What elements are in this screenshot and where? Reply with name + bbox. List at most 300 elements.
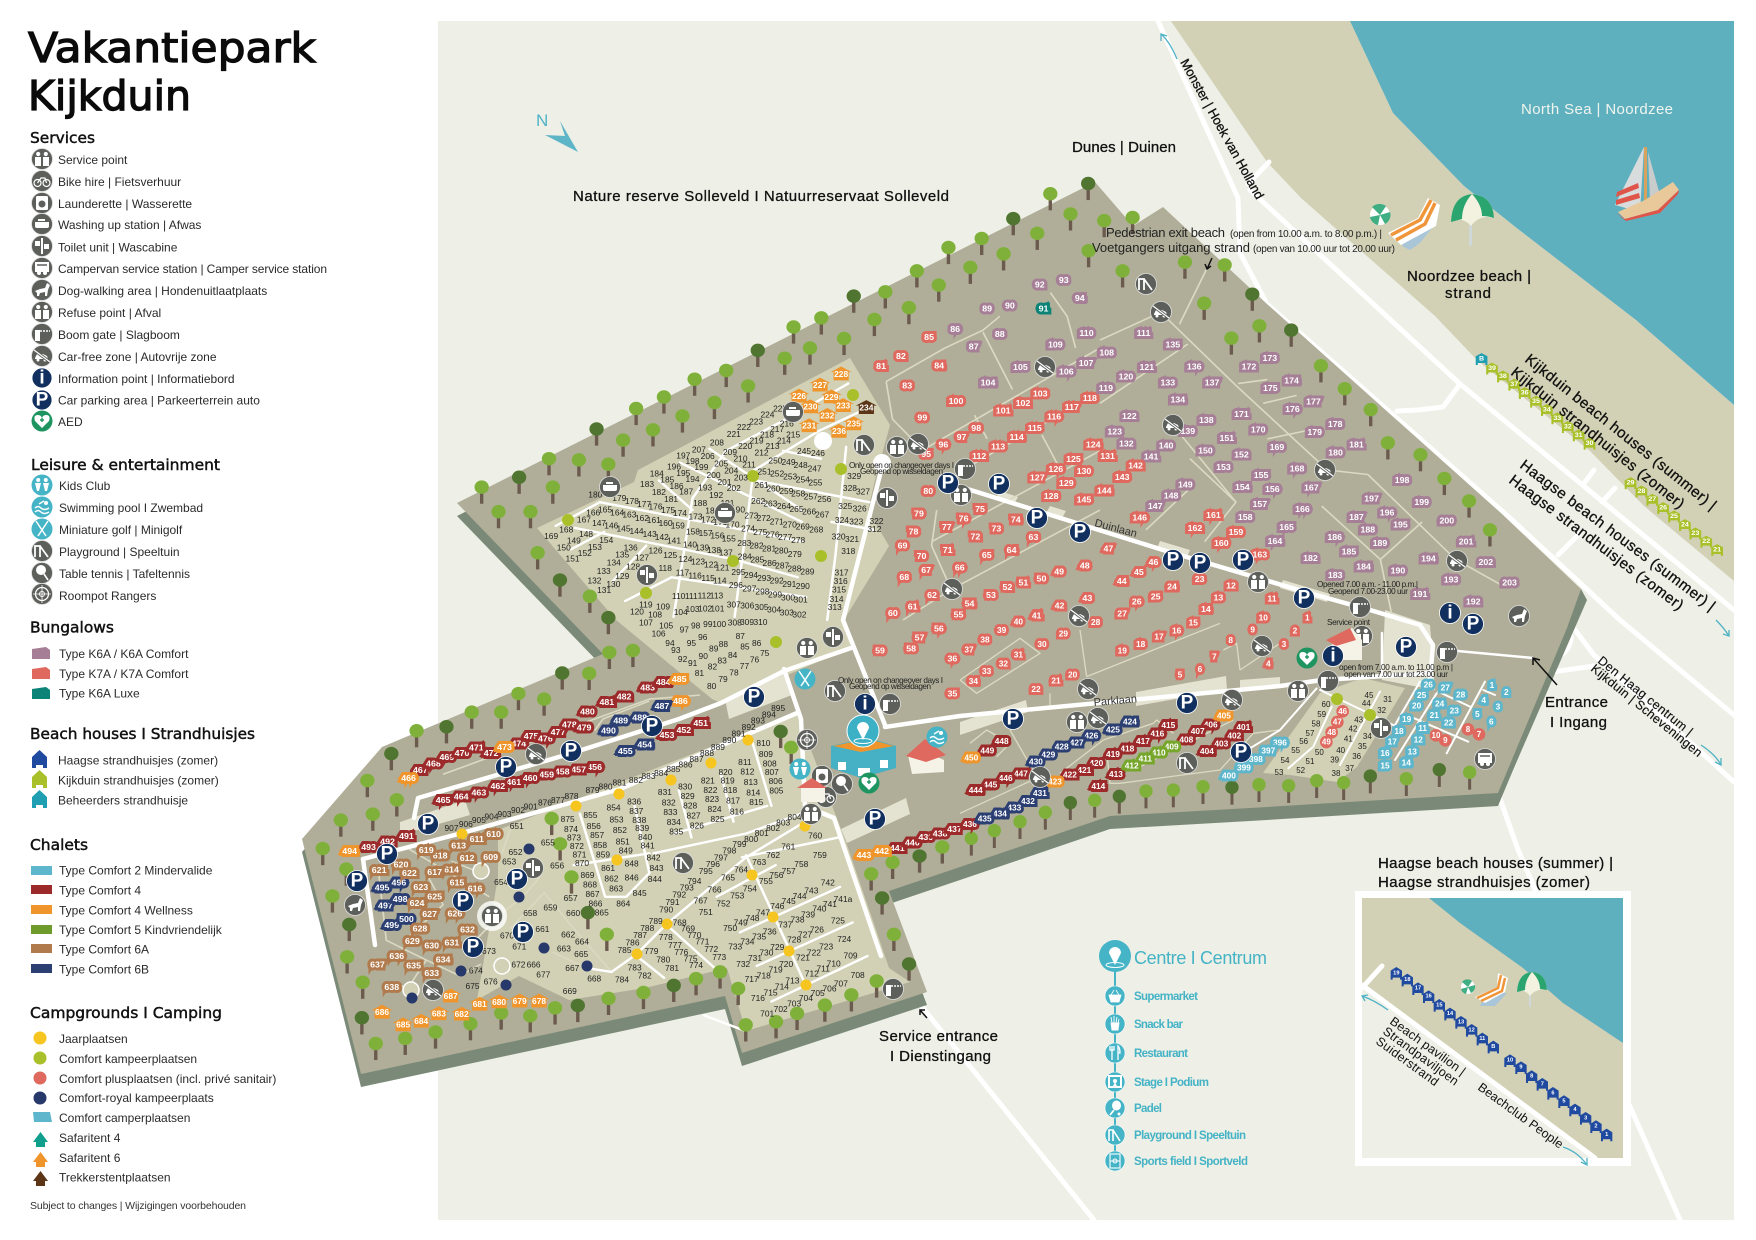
chalet labels (west): 441 (890, 843, 905, 853)
camping pitch numbers (north field): 134 (607, 559, 621, 567)
bungalow labels (north-east): 11 (1267, 594, 1277, 603)
camping pitch numbers (north field): 220 (738, 442, 753, 451)
centre facility names: Restaurant (1134, 1048, 1188, 1060)
bungalow labels: Type K7A: 96 (938, 440, 949, 450)
camping pitch numbers (east field): 41 (1344, 734, 1353, 743)
service labels: Dog-walking area | Hondenuitlaatplaats (58, 284, 267, 298)
chalet labels (south-centre): 19 (1118, 645, 1127, 655)
chalet labels (south-centre): 33 (982, 666, 992, 676)
bungalow labels: Type K7A: 118 (1083, 393, 1097, 403)
icon: centre pin (1099, 940, 1131, 972)
bungalow labels: Type K7A: 55 (954, 610, 964, 619)
chalet labels (west): 496 (392, 878, 407, 887)
chalet labels: Type Comfort 4 (59, 884, 141, 898)
parking signs (346, 472, 1484, 958)
camping pitch numbers (south field): 669 (563, 987, 577, 996)
inset: beach houses: B (1491, 1044, 1495, 1050)
parking signs: P (1235, 742, 1248, 762)
bungalow labels (north-east): 157 (1253, 499, 1267, 509)
chalet labels (south-centre): 9 (1250, 624, 1255, 634)
chalet labels (west): 56 (934, 624, 944, 634)
camping pitch numbers (south field): 98 (691, 622, 701, 630)
chalet labels (west): 629 (405, 936, 420, 946)
bungalow labels: Type K7A: 84 (934, 361, 944, 370)
camping pitch numbers (north field): 272 (757, 514, 771, 523)
camping pitch numbers (south field): 794 (687, 877, 702, 886)
camping pitch numbers (south field): 96 (698, 633, 708, 642)
centre facility names (1134, 991, 1248, 1168)
camping pitch numbers (south field): 858 (593, 841, 608, 850)
camping pitch numbers (south field): 665 (574, 950, 589, 959)
safari tents north: 230 (803, 403, 818, 412)
camping pitch numbers (south field): 760 (808, 832, 823, 841)
chalet labels (south-centre): 434 (993, 809, 1007, 819)
bungalow labels: Type K7A: 68 (899, 572, 909, 582)
camping pitch numbers (south field): 815 (749, 798, 764, 807)
chalet labels (south-centre): 21 (1051, 676, 1061, 686)
camping pitch numbers (south field): 732 (736, 960, 751, 969)
camping pitch numbers (south field): 892 (742, 723, 756, 732)
chalet labels (west): 630 (424, 941, 439, 951)
camping pitch numbers (south field): 746 (770, 902, 785, 911)
camping pitch numbers (north field): 187 (679, 488, 694, 497)
bungalow labels (north-east): 203 (1502, 578, 1517, 588)
camping pitch numbers (south field): 826 (690, 822, 704, 830)
inset: place labels: Strandpaviljoen (1380, 1024, 1461, 1088)
camping pitch numbers (south field): 797 (714, 854, 728, 862)
chalet labels (south-centre): 5 (1178, 670, 1183, 680)
parking signs: P (1181, 692, 1194, 714)
inset: place labels: Beach pavilion | (1387, 1014, 1468, 1078)
camping pitch numbers (north field): 125 (663, 551, 678, 560)
inset: beach houses: 19 (1393, 970, 1399, 976)
camping pitch numbers (south field): 94 (665, 639, 675, 648)
camper pitches and bungalows (east): 3 (1282, 639, 1287, 649)
camping pitch numbers (north field): 124 (678, 555, 693, 564)
info, parking signs: P (36, 390, 49, 410)
camping pitch numbers (south field): 853 (610, 816, 624, 824)
heading: Bungalows: Bungalows (30, 618, 114, 636)
camping pitch numbers (south field): 867 (586, 890, 600, 899)
bungalow labels (north-east): 198 (1395, 475, 1410, 485)
camping pitch numbers (north field): 140 (683, 541, 698, 550)
bungalow labels (north-east): 131 (1100, 451, 1115, 461)
camping pitch numbers (south field): 727 (798, 931, 813, 939)
camping pitch numbers (north field): 128 (626, 563, 641, 571)
camping pitch numbers (south field): 724 (837, 935, 852, 944)
bungalow labels: Type K7A: 116 (1047, 412, 1061, 422)
camping pitch numbers (north field): 261 (755, 481, 769, 490)
camping pitch numbers (south field): 787 (633, 931, 648, 940)
camping pitch numbers (north field): 278 (791, 536, 806, 545)
bungalow labels: Type K7A: 64 (1007, 545, 1017, 555)
small map notes: Geopend op wisseldagen (849, 682, 931, 691)
camping pitch numbers (north field): 133 (597, 567, 611, 576)
chalet labels (west): 452 (676, 725, 691, 735)
legend: Beach houses (30, 725, 255, 808)
camping pitch numbers (north field): 290 (796, 582, 810, 591)
camping pitch numbers (north field): 172 (701, 516, 716, 524)
camping pitch numbers (north field): 315 (832, 586, 847, 595)
AED icon (32, 410, 52, 432)
bungalow swatches (32, 647, 50, 699)
service labels: AED (58, 415, 83, 429)
camping pitch numbers (south field): 768 (673, 919, 687, 928)
bungalow labels: Type K6A (north-west): 105 (1013, 362, 1028, 372)
bungalow labels (north-east): 159 (1229, 527, 1244, 537)
camping pitch numbers (north field): 307 (727, 601, 741, 609)
AED icon at entrance (1296, 648, 1318, 668)
leisure icons (32, 474, 52, 604)
camping pitch numbers (north field): 164 (610, 508, 625, 517)
camping pitch numbers (north field): 280 (774, 547, 789, 556)
camper pitches and bungalows (east): 25 (1417, 690, 1427, 700)
camping pitch numbers (south field): 812 (740, 768, 755, 777)
chalet labels (south-centre): 405 (1217, 711, 1231, 721)
icon: restaurant (1105, 1043, 1125, 1063)
bungalow labels (north-east): 108 (1099, 348, 1114, 358)
chalet labels (west): 627 (422, 909, 437, 919)
camping pitch numbers (south field): 775 (684, 955, 698, 963)
camper pitches and bungalows (east): 3 (1496, 702, 1501, 712)
camping pitch numbers (north field): 170 (726, 521, 740, 529)
camping pitch numbers (south field): 870 (575, 859, 589, 868)
camping pitch numbers (east field): 32 (1377, 706, 1387, 715)
camping pitch numbers (south field): 757 (782, 867, 796, 876)
kids club icon (790, 758, 810, 780)
camping pitch numbers (east field): 42 (1349, 724, 1358, 733)
camping pitch numbers (south field): 807 (765, 768, 779, 777)
camping pitch numbers (north field): 147 (592, 519, 607, 528)
camping pitch numbers (north field): 276 (765, 531, 780, 539)
camping pitch numbers (east field): 56 (1299, 737, 1309, 746)
inset: beach houses: 15 (1436, 1002, 1442, 1008)
camping pitch numbers (north field): 254 (796, 476, 810, 484)
service labels: Refuse point | Afval (58, 306, 161, 320)
camping pitch numbers (south field): 721 (796, 954, 810, 962)
camping pitch numbers (south field): 75 (760, 649, 770, 658)
camping pitch numbers (south field): 834 (667, 818, 681, 827)
camping pitch numbers (south field): 889 (711, 743, 725, 752)
bungalow labels (north-east): 160 (1214, 538, 1229, 548)
camping pitch numbers (south field): 904 (484, 813, 499, 822)
bungalow labels: Type K7A: 79 (914, 509, 924, 518)
chalet labels (west): 465 (436, 795, 451, 805)
camper pitches and bungalows (east): 17 (1388, 736, 1397, 746)
camping pitch numbers (south field): 754 (743, 885, 757, 894)
camping pitch numbers (north field): 249 (781, 458, 796, 467)
inset: beach houses: 18 (1404, 977, 1410, 983)
camping pitch numbers (south field): 813 (744, 778, 758, 787)
camping pitch numbers (north field): 188 (693, 499, 708, 508)
camping pitch numbers (south field): 888 (700, 749, 715, 758)
camping pitch numbers (north field): 200 (707, 471, 721, 480)
camping pitch numbers (south field): 703 (787, 1000, 802, 1009)
chalet labels (west): 487 (655, 701, 670, 711)
inset: beach houses: 11 (1479, 1036, 1485, 1042)
camping pitch numbers (south field): 827 (687, 812, 701, 820)
bungalow labels: Type K6A (north-west): 91 (1039, 304, 1049, 313)
bungalow labels (north-east): 136 (1187, 362, 1202, 371)
icon: supermarket (1105, 986, 1125, 1006)
camping pitch numbers (south field): 842 (647, 854, 661, 862)
chalet labels (west): 458 (555, 767, 570, 777)
camping pitch numbers (south field): 796 (706, 860, 720, 869)
small map notes: open from 7.00 a.m. to 11.00 p.m | (1339, 663, 1453, 672)
bungalow labels: Type K7A: 65 (982, 550, 992, 560)
camping pitch numbers (south field): 883 (641, 772, 656, 781)
bungalow labels (north-east): 166 (1295, 504, 1310, 514)
small map notes: Only open on changeover days I (838, 676, 943, 685)
bungalow labels (north-east): 13 (1214, 593, 1224, 602)
bungalow labels: Type K7A: 128 (1044, 491, 1059, 501)
camping pitch numbers (north field): 174 (673, 509, 687, 518)
icon: deck chair (1388, 198, 1440, 250)
parking signs: P (351, 870, 364, 892)
beach house labels: Kijkduin strandhuisjes (zomer) (58, 774, 219, 788)
service labels (58, 153, 327, 429)
parking signs: P (869, 808, 882, 830)
bungalow labels (north-east): 189 (1373, 538, 1387, 548)
camping pitch numbers (north field): 135 (615, 551, 630, 559)
camping labels: Comfort camperplaatsen (59, 1111, 190, 1125)
chalet labels (south-centre): 420 (1089, 758, 1104, 768)
camping pitch numbers (north field): 152 (578, 549, 592, 558)
camping pitch numbers (north field): 262 (751, 497, 766, 506)
camping pitch numbers (north field): 186 (670, 482, 684, 491)
chalet labels (west): 626 (448, 909, 462, 918)
camping symbols (33, 1032, 52, 1186)
camping pitch numbers (north field): 253 (783, 472, 798, 481)
camper pitches and bungalows (east): 24 (1435, 698, 1445, 708)
service labels: Information point | Informatiebord (58, 372, 235, 386)
bungalow labels (north-east): 188 (1360, 525, 1375, 535)
camper pitches and bungalows (east): 23 (1450, 706, 1459, 716)
camping pitch numbers (north field): 184 (650, 470, 664, 478)
bungalow labels: Type K7A: 126 (1048, 464, 1063, 474)
small map notes (838, 461, 1453, 691)
camping pitch numbers (south field): 894 (762, 711, 776, 719)
chalet labels (west): 632 (460, 925, 475, 934)
chalet labels (west): 615 (450, 878, 465, 887)
camping pitch numbers (north field): 324 (835, 516, 849, 525)
camping pitch numbers (north field): 195 (676, 469, 691, 478)
parking signs: P (381, 844, 394, 864)
bungalow labels: Type K7A: 85 (924, 332, 934, 342)
camping pitch numbers (south field): 672 (511, 961, 526, 970)
camping pitch numbers (north field): 300 (781, 594, 796, 603)
camping pitch numbers (north field): 129 (615, 572, 630, 581)
map label: Den Haag: Kijkduin | Scheveningen (1588, 661, 1705, 760)
bungalow labels: Type K7A: 66 (955, 563, 965, 572)
camping pitch numbers (north field): 294 (744, 571, 759, 580)
camping labels: Safaritent 6 (59, 1151, 121, 1165)
camper pitches and bungalows (east): 16 (1380, 748, 1390, 758)
camping pitch numbers (south field): 780 (656, 956, 671, 964)
bungalow labels (north-east): 146 (1132, 513, 1147, 522)
camping pitch numbers (north field): 267 (815, 511, 830, 520)
chalet labels (west): 611 (470, 834, 484, 844)
inset: direction arrows (1362, 995, 1587, 1165)
bungalow labels: Type K7A / K7A Comfort (59, 667, 189, 681)
central buildings (790, 628, 1362, 802)
camping pitch numbers (north field): 312 (867, 525, 882, 534)
camping pitch numbers (north field): 180 (588, 491, 603, 499)
camping pitch numbers (south field): 854 (607, 804, 621, 813)
parking signs: P (748, 686, 761, 708)
chalet labels (west): 472 (484, 748, 499, 758)
bungalow labels: Type K6A (north-west) (876, 275, 1101, 620)
camping pitch numbers (south field): 107 (639, 619, 653, 628)
leisure labels: Table tennis | Tafeltennis (59, 567, 190, 581)
chalet labels: Type Comfort 2 Mindervalide (59, 864, 213, 878)
comfort plus pitches: 9 (1443, 736, 1448, 745)
camping pitch numbers (north field): 251 (758, 468, 772, 476)
camping pitch numbers (south field): 87 (736, 632, 745, 641)
camping pitch numbers (north field): 169 (544, 532, 559, 541)
camper pitches and bungalows (east): 14 (1402, 758, 1411, 768)
inset: beach houses: 12 (1469, 1027, 1475, 1033)
camping pitch numbers (north field): 326 (853, 505, 867, 513)
camping pitch numbers (south field): 811 (738, 758, 752, 767)
camping pitch numbers (south field): 779 (644, 947, 659, 956)
chalet labels (west): 621 (372, 865, 387, 875)
camping pitch numbers (east field): 43 (1354, 715, 1364, 724)
bungalow labels (north-east): 141 (1144, 452, 1159, 462)
chalet labels (west): 453 (660, 730, 675, 740)
inset: beach houses: 16 (1426, 994, 1432, 1000)
chalet labels (south-centre): 436 (963, 819, 977, 829)
camper pitches and bungalows (east): 2 (1504, 687, 1509, 697)
camping pitch numbers (north field): 296 (729, 581, 743, 590)
bungalow labels: Type K7A: 61 (908, 602, 918, 611)
north arrow: N (536, 111, 548, 130)
chalet labels (west): 443 (857, 850, 872, 860)
parking signs: i (1447, 602, 1453, 624)
trees (316, 177, 1497, 1060)
bungalow labels: Type K7A: 43 (1082, 593, 1092, 603)
camping pitch numbers (north field): 154 (599, 536, 614, 545)
safari tents north: 229 (824, 393, 839, 402)
camping pitch numbers (south field): 92 (678, 655, 688, 664)
parking signs: P (517, 922, 530, 942)
camping pitch numbers (south field): 709 (844, 952, 858, 960)
chalet labels (south-centre): 7 (1212, 652, 1217, 662)
Kijkduin beach houses: 24 (1681, 522, 1689, 528)
camper pitches and bungalows (east): 1 (1490, 680, 1495, 690)
chalet labels (south-centre) (963, 610, 1271, 829)
chalet labels (south-centre): 418 (1120, 743, 1135, 753)
camping pitch numbers (south field): 734 (740, 938, 755, 947)
chalet labels (west): 628 (413, 924, 428, 933)
camping pitch numbers (north field): 301 (794, 596, 808, 605)
camping pitch numbers (south field): 825 (711, 815, 725, 824)
camping pitch numbers (north field): 252 (770, 470, 785, 478)
chalet labels (south-centre): 446 (999, 773, 1013, 783)
camping pitch numbers (north field): 321 (845, 535, 860, 544)
comfort plus pitches: 47 (1333, 717, 1342, 726)
bungalow labels (north-east): 137 (1205, 378, 1220, 388)
safari tents south: 686 (375, 1008, 390, 1017)
safari tents south: 684 (414, 1017, 429, 1026)
camping pitch numbers (north field): 273 (744, 512, 759, 520)
centre legend (1099, 940, 1267, 1171)
camping pitch numbers (north field): 299 (768, 591, 783, 599)
camping pitch numbers (south field): 885 (666, 765, 681, 774)
bungalow labels (north-east): 111 (1137, 328, 1151, 338)
camper pitches and bungalows (east): 21 (1430, 710, 1439, 720)
camping pitch numbers (south field): 906 (459, 820, 473, 829)
chalet labels (west): 473 (497, 742, 512, 752)
camping pitch numbers (south field): 814 (746, 789, 761, 798)
camping pitch numbers (south field): 784 (615, 976, 629, 985)
safari tents north: 226 (792, 392, 807, 401)
chalet labels (west): 498 (393, 894, 408, 904)
chalet labels (west): 477 (551, 727, 566, 737)
camping pitch numbers (south field): 748 (745, 914, 760, 923)
camping pitch numbers (south field): 93 (671, 646, 681, 655)
camping pitch numbers (north field): 137 (719, 549, 733, 558)
camper pitches and bungalows (east): 27 (1441, 682, 1450, 692)
bungalow labels: Type K7A: 127 (1030, 473, 1045, 482)
bungalow labels: Type K7A: 75 (975, 504, 985, 514)
camping pitch numbers (south field) (445, 618, 865, 1019)
small map notes: Geopend op wisseldagen (860, 467, 943, 476)
bungalow labels (north-east): 25 (1151, 592, 1161, 602)
camping pitch numbers (north field): 284 (738, 553, 752, 561)
camping pitch numbers (south field): 878 (564, 792, 579, 801)
camping pitch numbers (north field): 183 (640, 480, 655, 489)
camping pitch numbers (south field): 802 (766, 824, 781, 833)
map label: Kijkduin beach houses: Kijkduin strandhuisjes (zomer) (1508, 364, 1688, 513)
chalet labels (south-centre): 34 (969, 676, 978, 686)
camping pitch numbers (north field): 282 (750, 542, 764, 550)
bungalow labels (north-east): 24 (1167, 582, 1177, 592)
camping pitch numbers (north field): 109 (656, 603, 671, 611)
camping pitch numbers (south field): 905 (472, 816, 486, 825)
camping pitch numbers (south field): 308 (728, 619, 742, 628)
camping pitch numbers (south field): 80 (707, 682, 717, 691)
centre facility names: Sports field I Sportveld (1134, 1156, 1248, 1168)
camping pitch numbers (north field): 211 (742, 461, 756, 469)
camping pitch numbers (south field): 901 (524, 803, 538, 811)
inset: beach houses: 14 (1447, 1011, 1454, 1017)
bungalow labels (north-east): 143 (1115, 472, 1130, 482)
bungalow labels: Type K7A: 83 (902, 381, 912, 390)
bungalow labels: Type K7A: 103 (1033, 389, 1048, 399)
camping pitch numbers (south field): 655 (541, 839, 555, 847)
camping pitch numbers (south field): 651 (510, 822, 524, 831)
camping pitch numbers (south field): 869 (580, 871, 595, 880)
chalet labels (south-centre): 416 (1150, 729, 1165, 739)
map label: Noordzee beach: Noordzee beach | (1407, 268, 1531, 285)
chalet labels (south-centre): 15 (1189, 617, 1198, 627)
chalet labels (west): 438 (933, 829, 948, 838)
parking signs: P (457, 890, 470, 912)
bungalow labels (north-east): 162 (1188, 523, 1203, 533)
camping pitch numbers (north field): 193 (698, 484, 713, 493)
camping pitch numbers (east field): 50 (1315, 748, 1324, 757)
camping pitch numbers (south field): 832 (662, 799, 676, 807)
camping pitch numbers (south field): 718 (757, 972, 771, 980)
map label: Noordzee beach (1407, 268, 1531, 302)
camping pitch numbers (north field): 182 (652, 488, 666, 497)
bungalow labels: Type K7A: 76 (959, 514, 969, 524)
map label: pedestrian exit: (open van 10.00 uur tot 20.00 uur) (1253, 244, 1395, 255)
heading: Services: Services (30, 129, 95, 147)
camping pitch numbers (north field): 116 (688, 572, 702, 580)
camping pitch numbers (east field): 36 (1352, 752, 1362, 761)
